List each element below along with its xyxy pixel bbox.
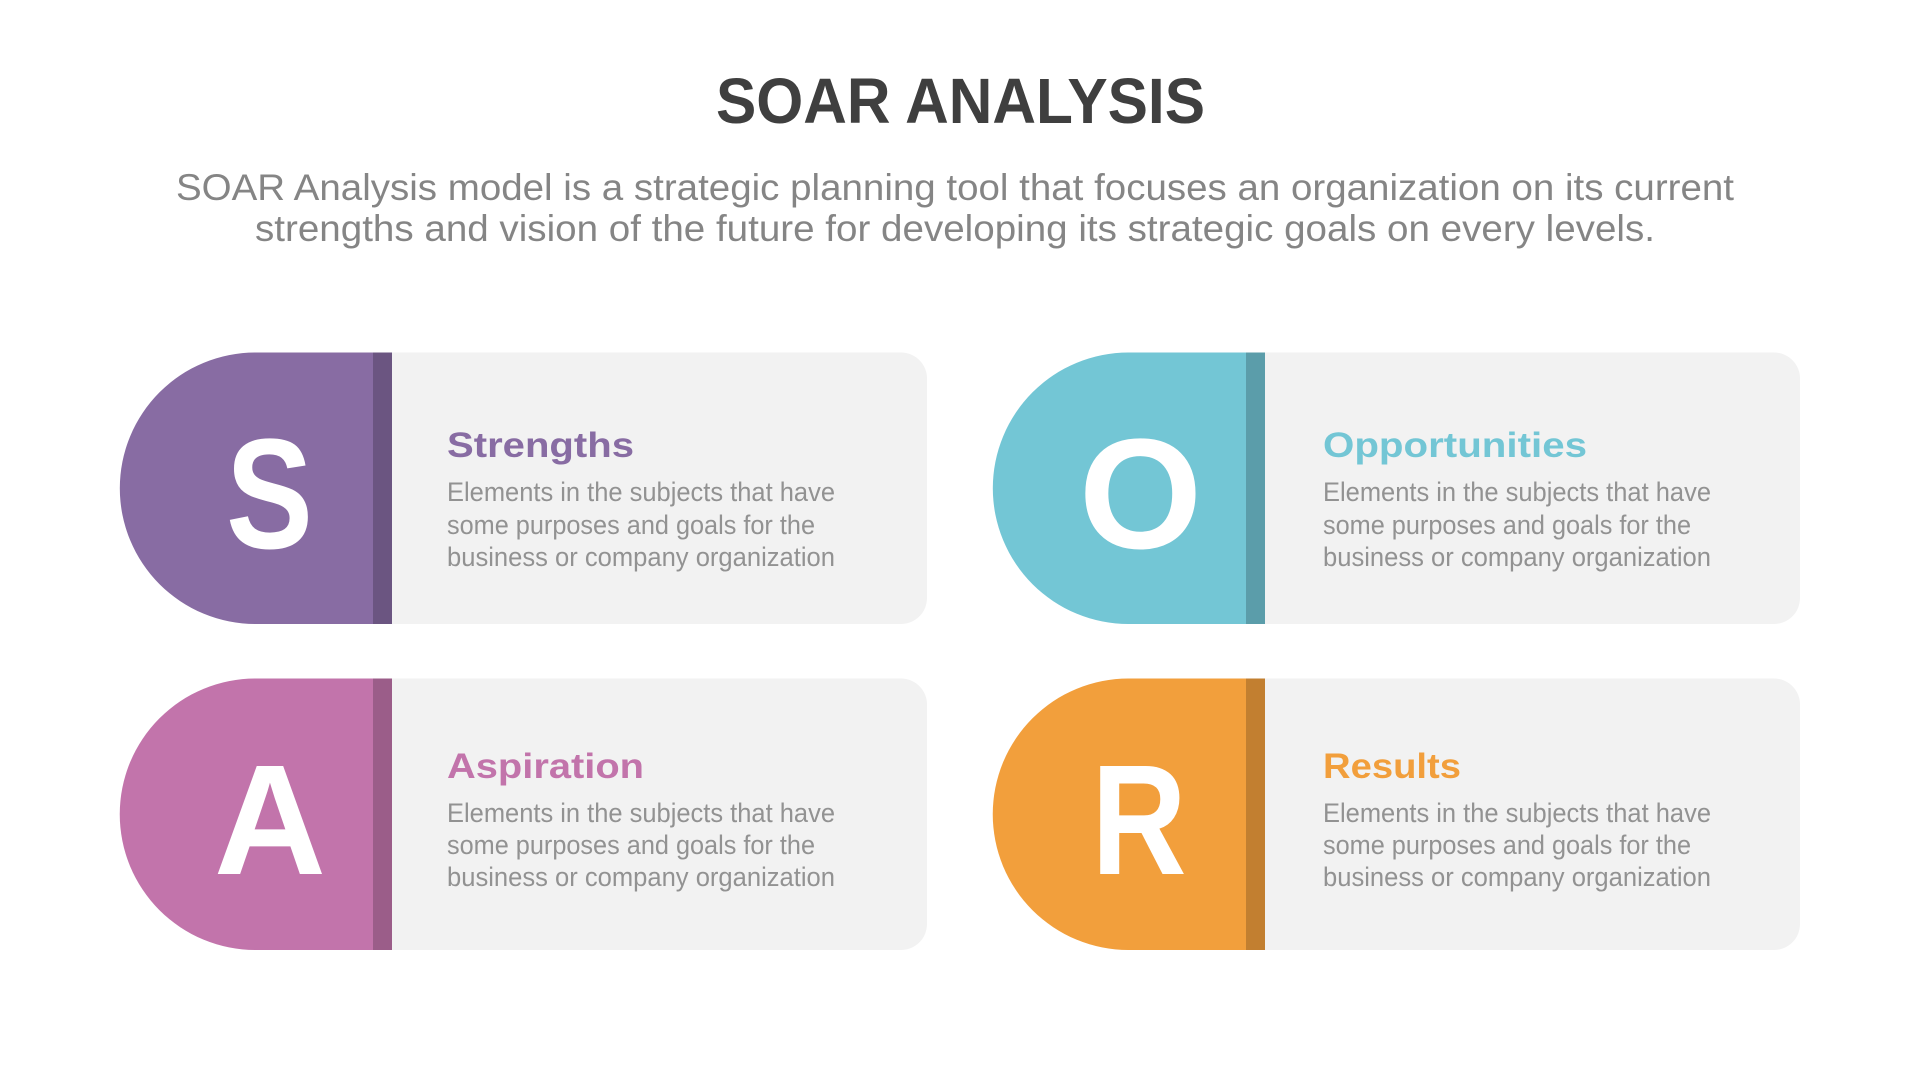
letter R: R (1091, 732, 1187, 908)
panel: opportunities (993, 352, 1800, 624)
heading: results: Results (1323, 747, 1461, 786)
letter A: A (214, 733, 326, 908)
badge: opportunities (993, 352, 1246, 624)
heading: opportunities: Opportunities (1323, 426, 1587, 465)
badge band: aspiration (373, 678, 392, 950)
card background: results (1170, 678, 1800, 950)
badge: results (993, 678, 1246, 950)
badge band: opportunities (1246, 352, 1265, 624)
body text: results (1323, 798, 1711, 892)
heading: strengths: Strengths (447, 426, 634, 465)
description text: strengths and vision of the future for developing its strategic goals on every levels. (255, 208, 1655, 249)
badge: aspiration (120, 678, 373, 950)
badge band: strengths (373, 352, 392, 624)
panel: aspiration (120, 678, 927, 950)
body text: opportunities (1323, 477, 1711, 572)
description text: SOAR Analysis model is a strategic planning tool that focuses an organization on its current (176, 167, 1735, 208)
body text: aspiration: business or company organization (447, 862, 835, 892)
body text: aspiration (447, 798, 835, 892)
panel: strengths (120, 352, 927, 624)
body text: strengths: Elements in the subjects that have (447, 477, 835, 507)
body text: results: some purposes and goals for the (1323, 830, 1691, 860)
body text: results: Elements in the subjects that have (1323, 798, 1711, 828)
body text: aspiration: some purposes and goals for the (447, 830, 815, 860)
description text (176, 167, 1735, 249)
body text: opportunities: Elements in the subjects that have (1323, 477, 1711, 507)
card background: aspiration (300, 678, 927, 950)
body text: strengths: business or company organization (447, 542, 835, 572)
body text: strengths: some purposes and goals for the (447, 510, 815, 540)
letter S: S (226, 405, 313, 582)
heading: aspiration: Aspiration (447, 747, 644, 786)
badge: strengths (120, 352, 373, 624)
badge band: results (1246, 678, 1265, 950)
body text: results: business or company organization (1323, 862, 1711, 892)
body text: opportunities: business or company organization (1323, 542, 1711, 572)
card background: strengths (300, 352, 927, 624)
body text: strengths (447, 477, 835, 572)
body text: opportunities: some purposes and goals for the (1323, 510, 1691, 540)
panel: results (993, 678, 1800, 950)
title: SOAR ANALYSIS (716, 65, 1205, 137)
body text: aspiration: Elements in the subjects that have (447, 798, 835, 828)
letter O: O (1079, 407, 1202, 582)
card background: opportunities (1170, 352, 1800, 624)
